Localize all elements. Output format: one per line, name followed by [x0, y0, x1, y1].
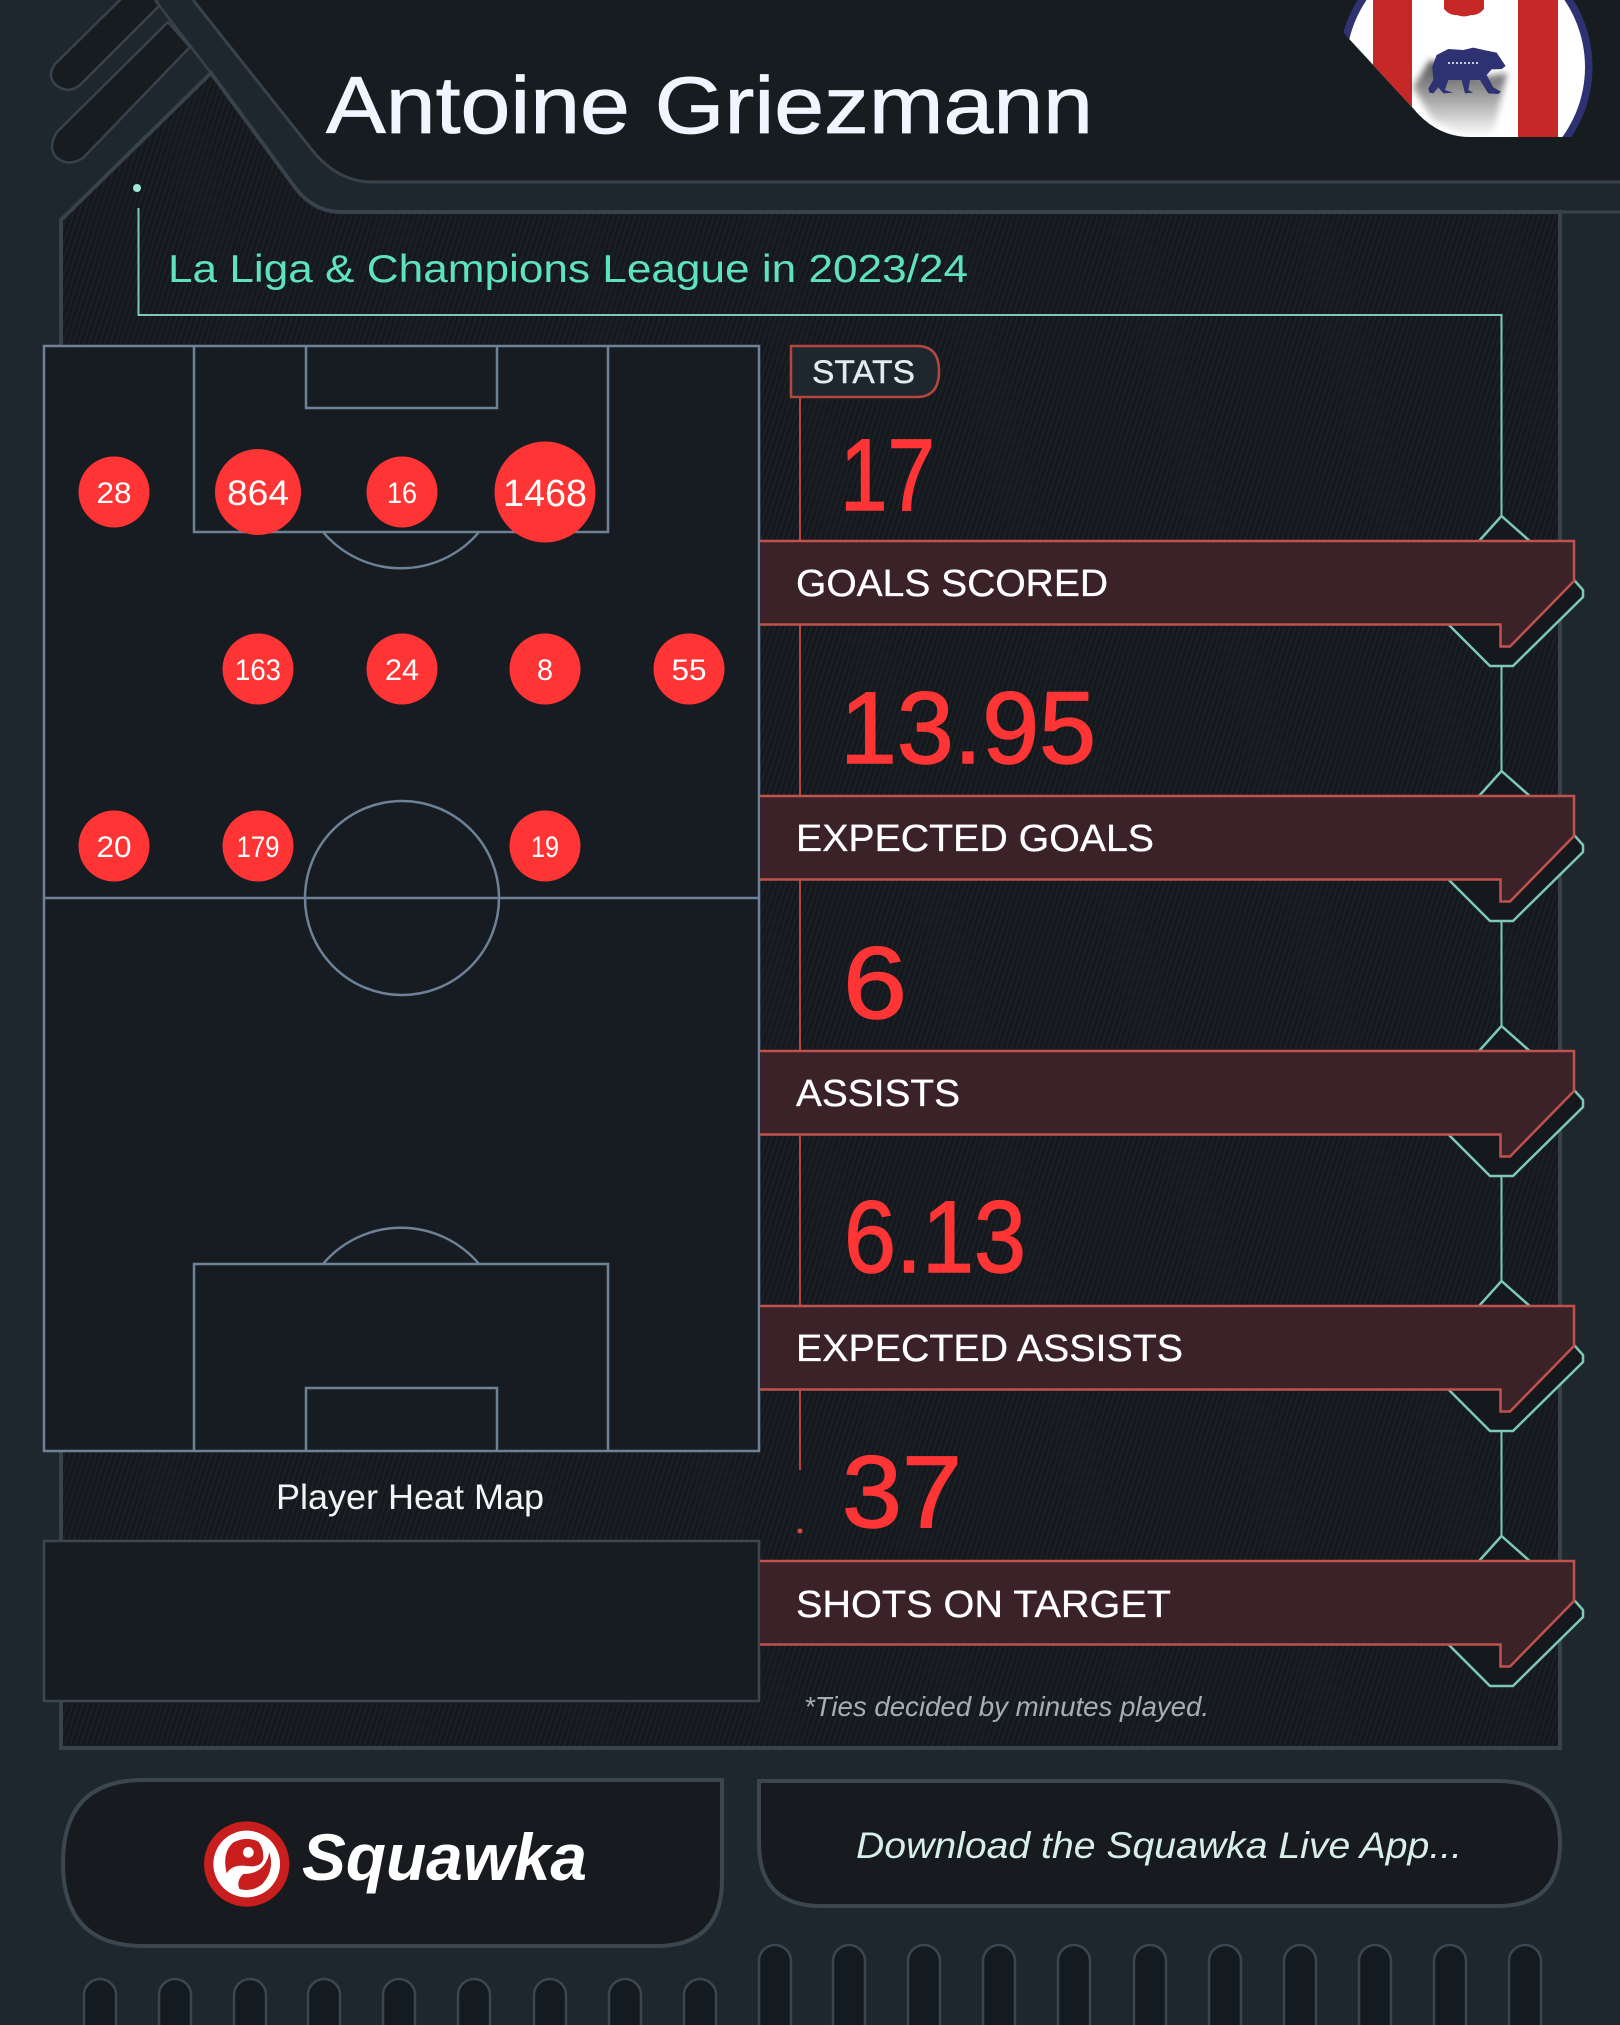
heat map values: 179: [236, 831, 280, 864]
heat map values: 28: [96, 477, 132, 510]
decorative corner pills: [51, 0, 190, 162]
stat: shots on target: 37: [842, 1435, 962, 1549]
heat map bubbles: [78, 442, 724, 882]
empty lower box: [44, 1541, 759, 1701]
heat map values: 8: [537, 654, 553, 687]
stat: shots on target: SHOTS ON TARGET: [796, 1584, 1171, 1626]
subtitle: La Liga & Champions League in 2023/24: [168, 248, 968, 291]
heat map values: 55: [672, 654, 706, 687]
pitch outline and markings: [44, 346, 759, 1451]
icon: squawka logo: [204, 1821, 289, 1907]
squawka wordmark: Squawka: [302, 1820, 587, 1894]
header panel: [193, 0, 1620, 182]
heat map caption: Player Heat Map: [276, 1478, 544, 1517]
heat map values: 20: [96, 831, 132, 864]
stat: assists: 6: [843, 926, 907, 1040]
stat: expected assists: [760, 1180, 1583, 1431]
heat map values: 864: [227, 474, 289, 513]
decorative bottom pills left: [84, 1979, 716, 2025]
stat: goals scored: 17: [840, 418, 935, 532]
heat map values: 163: [235, 654, 281, 687]
stats tag: STATS: [812, 354, 915, 390]
decorative bottom pills right: [759, 1945, 1541, 2025]
app download panel: Download the Squawka Live App...: [856, 1825, 1462, 1866]
stat: expected assists: 6.13: [844, 1180, 1026, 1294]
stat: assists: ASSISTS: [796, 1073, 960, 1115]
heat map values: 24: [385, 654, 419, 687]
stats tag: [791, 346, 939, 397]
stats spine line: [798, 397, 802, 1534]
footnote: *Ties decided by minutes played.: [804, 1691, 1209, 1722]
app download panel: [759, 1781, 1560, 1906]
heat map values: [96, 473, 706, 864]
club badge: [1343, 0, 1592, 137]
stat: goals scored: [760, 418, 1583, 666]
heat map values: 1468: [503, 473, 587, 515]
stat: expected goals: 13.95: [840, 671, 1096, 785]
stat: assists: [760, 926, 1583, 1176]
title: Antoine Griezmann: [326, 61, 1093, 151]
stat: expected assists: EXPECTED ASSISTS: [796, 1328, 1183, 1370]
stat: shots on target: [760, 1435, 1583, 1686]
heat map values: 19: [531, 831, 559, 864]
stat: expected goals: [760, 671, 1583, 921]
stat: goals scored: GOALS SCORED: [796, 563, 1108, 605]
subtitle connector line: [133, 184, 1502, 1536]
stat: expected goals: EXPECTED GOALS: [796, 818, 1154, 860]
squawka logo panel: [63, 1780, 722, 1946]
heat map values: 16: [387, 477, 417, 510]
football pitch heat map: [44, 346, 759, 1451]
